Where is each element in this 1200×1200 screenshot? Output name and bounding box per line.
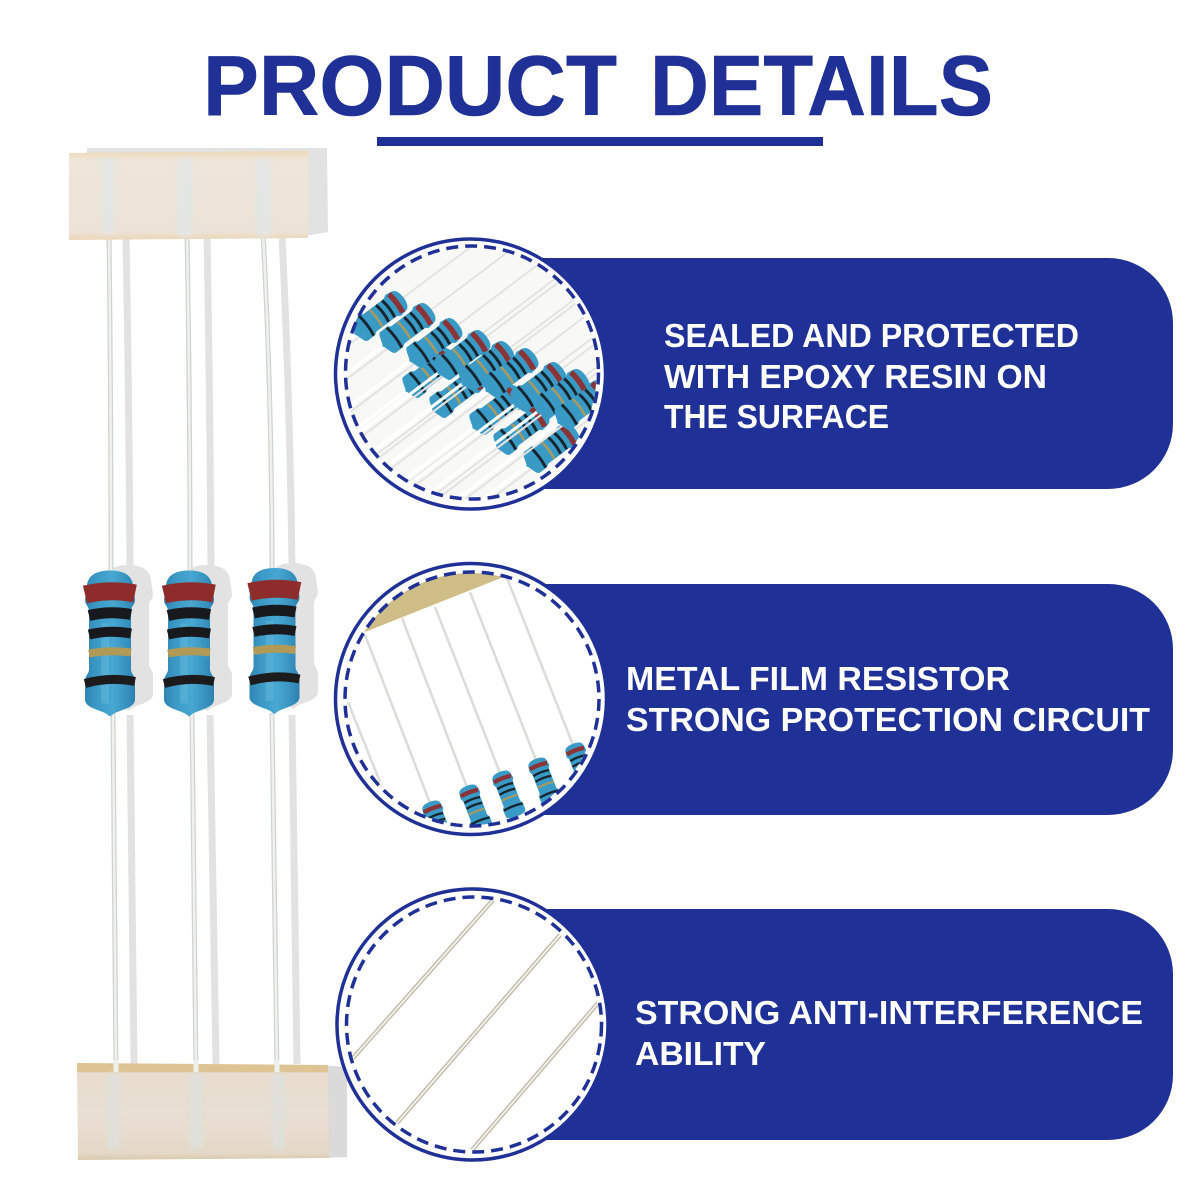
feature panel 3 (337, 889, 1173, 1160)
panel background (470, 909, 1173, 1140)
title underline (377, 137, 823, 146)
panel 1 text: SEALED AND PROTECTED (664, 318, 1079, 355)
resistor 3 (250, 568, 300, 714)
feature panel 1 (334, 237, 1173, 511)
bottom tape (77, 1060, 329, 1160)
panel 2 text: STRONG PROTECTION CIRCUIT (626, 702, 1151, 739)
panel 1 text: THE SURFACE (664, 399, 889, 436)
title: DETAILS (650, 39, 993, 134)
panel background (470, 258, 1173, 489)
panel 2 text: METAL FILM RESISTOR (626, 661, 1010, 698)
resistor 1 (85, 570, 135, 716)
circle photo: wire leads close-up (337, 889, 608, 1160)
lead shadows (126, 236, 297, 1064)
title: PRODUCT (203, 39, 617, 134)
panel background (470, 584, 1173, 815)
circle photo: bulk resistors (334, 237, 604, 511)
panel 3 text: STRONG ANTI-INTERFERENCE (635, 995, 1143, 1032)
product photo: three taped resistors (69, 148, 347, 1160)
top tape (69, 151, 308, 240)
bottom tape shadow (320, 1065, 347, 1158)
panel 3 text: ABILITY (635, 1036, 766, 1073)
top tape shadow (87, 148, 328, 237)
resistor 2 (164, 570, 214, 716)
wire leads (109, 232, 277, 1072)
resistor shadows (103, 563, 318, 711)
panel 1 text: WITH EPOXY RESIN ON (664, 359, 1047, 396)
circle photo: resistors on tape (336, 560, 606, 852)
feature panel 2 (336, 560, 1173, 852)
